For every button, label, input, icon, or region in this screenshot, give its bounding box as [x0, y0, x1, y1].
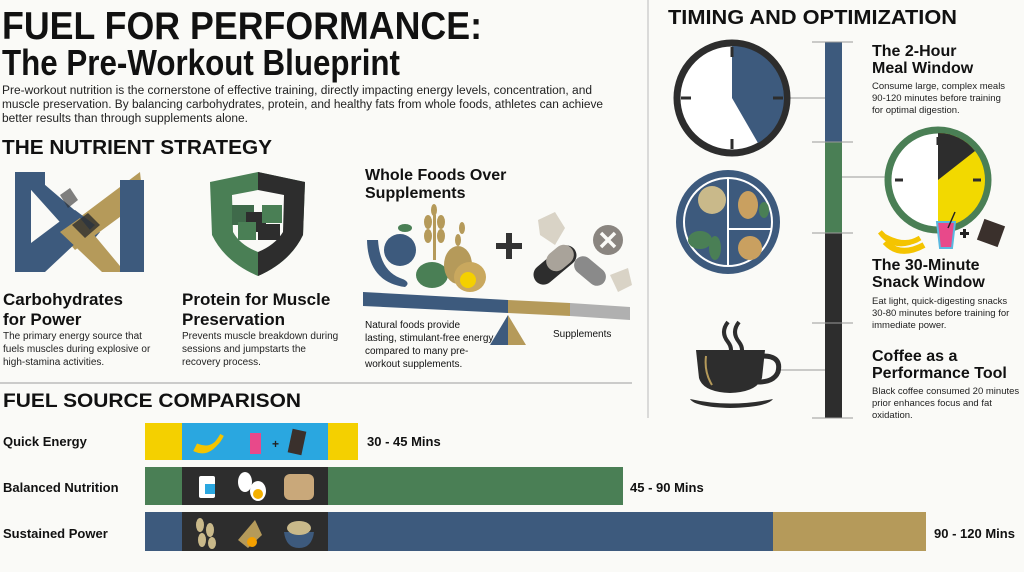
- bar: sustained power: [3, 512, 1015, 551]
- bar: quick energy: Quick Energy: [3, 434, 88, 449]
- intro paragraph: [2, 85, 603, 125]
- icon: supplements: [529, 212, 632, 292]
- text: 30-minute snack window: Eat light, quick-digesting snacks: [872, 296, 1007, 307]
- icon: snacks: [880, 212, 1005, 251]
- text: natural foods: Natural foods provide: [365, 320, 460, 331]
- text: coffee: prior enhances focus and fat: [872, 398, 992, 409]
- label: supplements: Supplements: [553, 329, 611, 340]
- seesaw: [363, 292, 630, 345]
- text: 2-hour meal window: Meal Window: [872, 60, 974, 77]
- text: 2-hour meal window: [872, 43, 1005, 116]
- title: The Pre-Workout Blueprint: [2, 42, 400, 83]
- text: 2-hour meal window: 90-120 minutes before training: [872, 93, 1001, 104]
- text: coffee: Performance Tool: [872, 365, 1007, 382]
- text: 2-hour meal window: for optimal digestion.: [872, 105, 960, 116]
- icon: plus: [496, 233, 522, 259]
- icon: whole foods: [367, 204, 486, 292]
- icon: protein shield: [210, 172, 305, 276]
- bar: balanced nutrition: 45 - 90 Mins: [630, 480, 704, 495]
- intro paragraph: Pre-workout nutrition is the cornerstone of effective training, directly impacting energy levels, concentration, and: [2, 85, 592, 97]
- text: protein: Prevents muscle breakdown during: [182, 331, 338, 342]
- heading: timing: TIMING AND OPTIMIZATION: [668, 7, 957, 29]
- text: coffee: Black coffee consumed 20 minutes: [872, 386, 1019, 397]
- text: protein: Preservation: [182, 310, 285, 329]
- icon: clock 2-hour: [677, 43, 787, 153]
- icon: plate: [676, 170, 780, 274]
- icon: 30-minute clock: [888, 130, 988, 230]
- text: coffee: Coffee as a: [872, 348, 957, 365]
- text: coffee: [872, 348, 1019, 421]
- bar: quick energy: +: [272, 437, 279, 451]
- text: carbohydrates: The primary energy source that: [3, 331, 142, 342]
- bar: quick energy: [3, 423, 441, 460]
- title: FUEL FOR PERFORMANCE:: [2, 5, 482, 48]
- text: 30-minute snack window: immediate power.: [872, 320, 946, 331]
- bar: sustained power: Sustained Power: [3, 526, 108, 541]
- heading: whole foods: [365, 167, 506, 202]
- text: natural foods: lasting, stimulant-free energy: [365, 333, 493, 344]
- text: protein: [182, 290, 338, 368]
- heading: nutrient strategy: THE NUTRIENT STRATEGY: [2, 137, 273, 159]
- text: 30-minute snack window: [872, 257, 1009, 331]
- text: 2-hour meal window: Consume large, complex meals: [872, 81, 1005, 92]
- intro paragraph: muscle preservation. By balancing carbohydrates, protein, and healthy fats from whole foods, athletes can achieve: [2, 99, 603, 111]
- heading: whole foods: Whole Foods Over: [365, 167, 506, 184]
- text: 30-minute snack window: 30-80 minutes before training for: [872, 308, 1009, 319]
- timeline bar: [780, 42, 886, 418]
- text: natural foods: compared to many pre-: [365, 346, 468, 357]
- text: 30-minute snack window: Snack Window: [872, 274, 985, 291]
- text: carbohydrates: [3, 290, 151, 368]
- text: natural foods: workout supplements.: [364, 359, 462, 370]
- text: protein: recovery process.: [182, 357, 261, 368]
- title: [2, 5, 482, 83]
- icon: coffee cup: [690, 322, 779, 408]
- intro paragraph: better results than through supplements alone.: [2, 113, 248, 125]
- bar: balanced nutrition: Balanced Nutrition: [3, 480, 119, 495]
- text: carbohydrates: fuels muscles during explosive or: [3, 344, 151, 355]
- heading: whole foods: Supplements: [365, 185, 466, 202]
- text: protein: Protein for Muscle: [182, 290, 330, 309]
- icon: carbohydrates: [15, 172, 144, 272]
- text: protein: sessions and jumpstarts the: [182, 344, 306, 355]
- text: natural foods: [364, 320, 493, 370]
- text: coffee: oxidation.: [872, 410, 913, 421]
- text: 30-minute snack window: The 30-Minute: [872, 257, 980, 274]
- text: carbohydrates: high-stamina activities.: [3, 357, 104, 368]
- text: carbohydrates: Carbohydrates: [3, 290, 123, 309]
- heading: fuel source comparison: FUEL SOURCE COMPARISON: [3, 391, 301, 412]
- bar: sustained power: 90 - 120 Mins: [934, 526, 1015, 541]
- text: 2-hour meal window: The 2-Hour: [872, 43, 956, 60]
- bar: quick energy: 30 - 45 Mins: [367, 434, 441, 449]
- bar: balanced nutrition: [3, 467, 704, 505]
- text: carbohydrates: for Power: [3, 310, 82, 329]
